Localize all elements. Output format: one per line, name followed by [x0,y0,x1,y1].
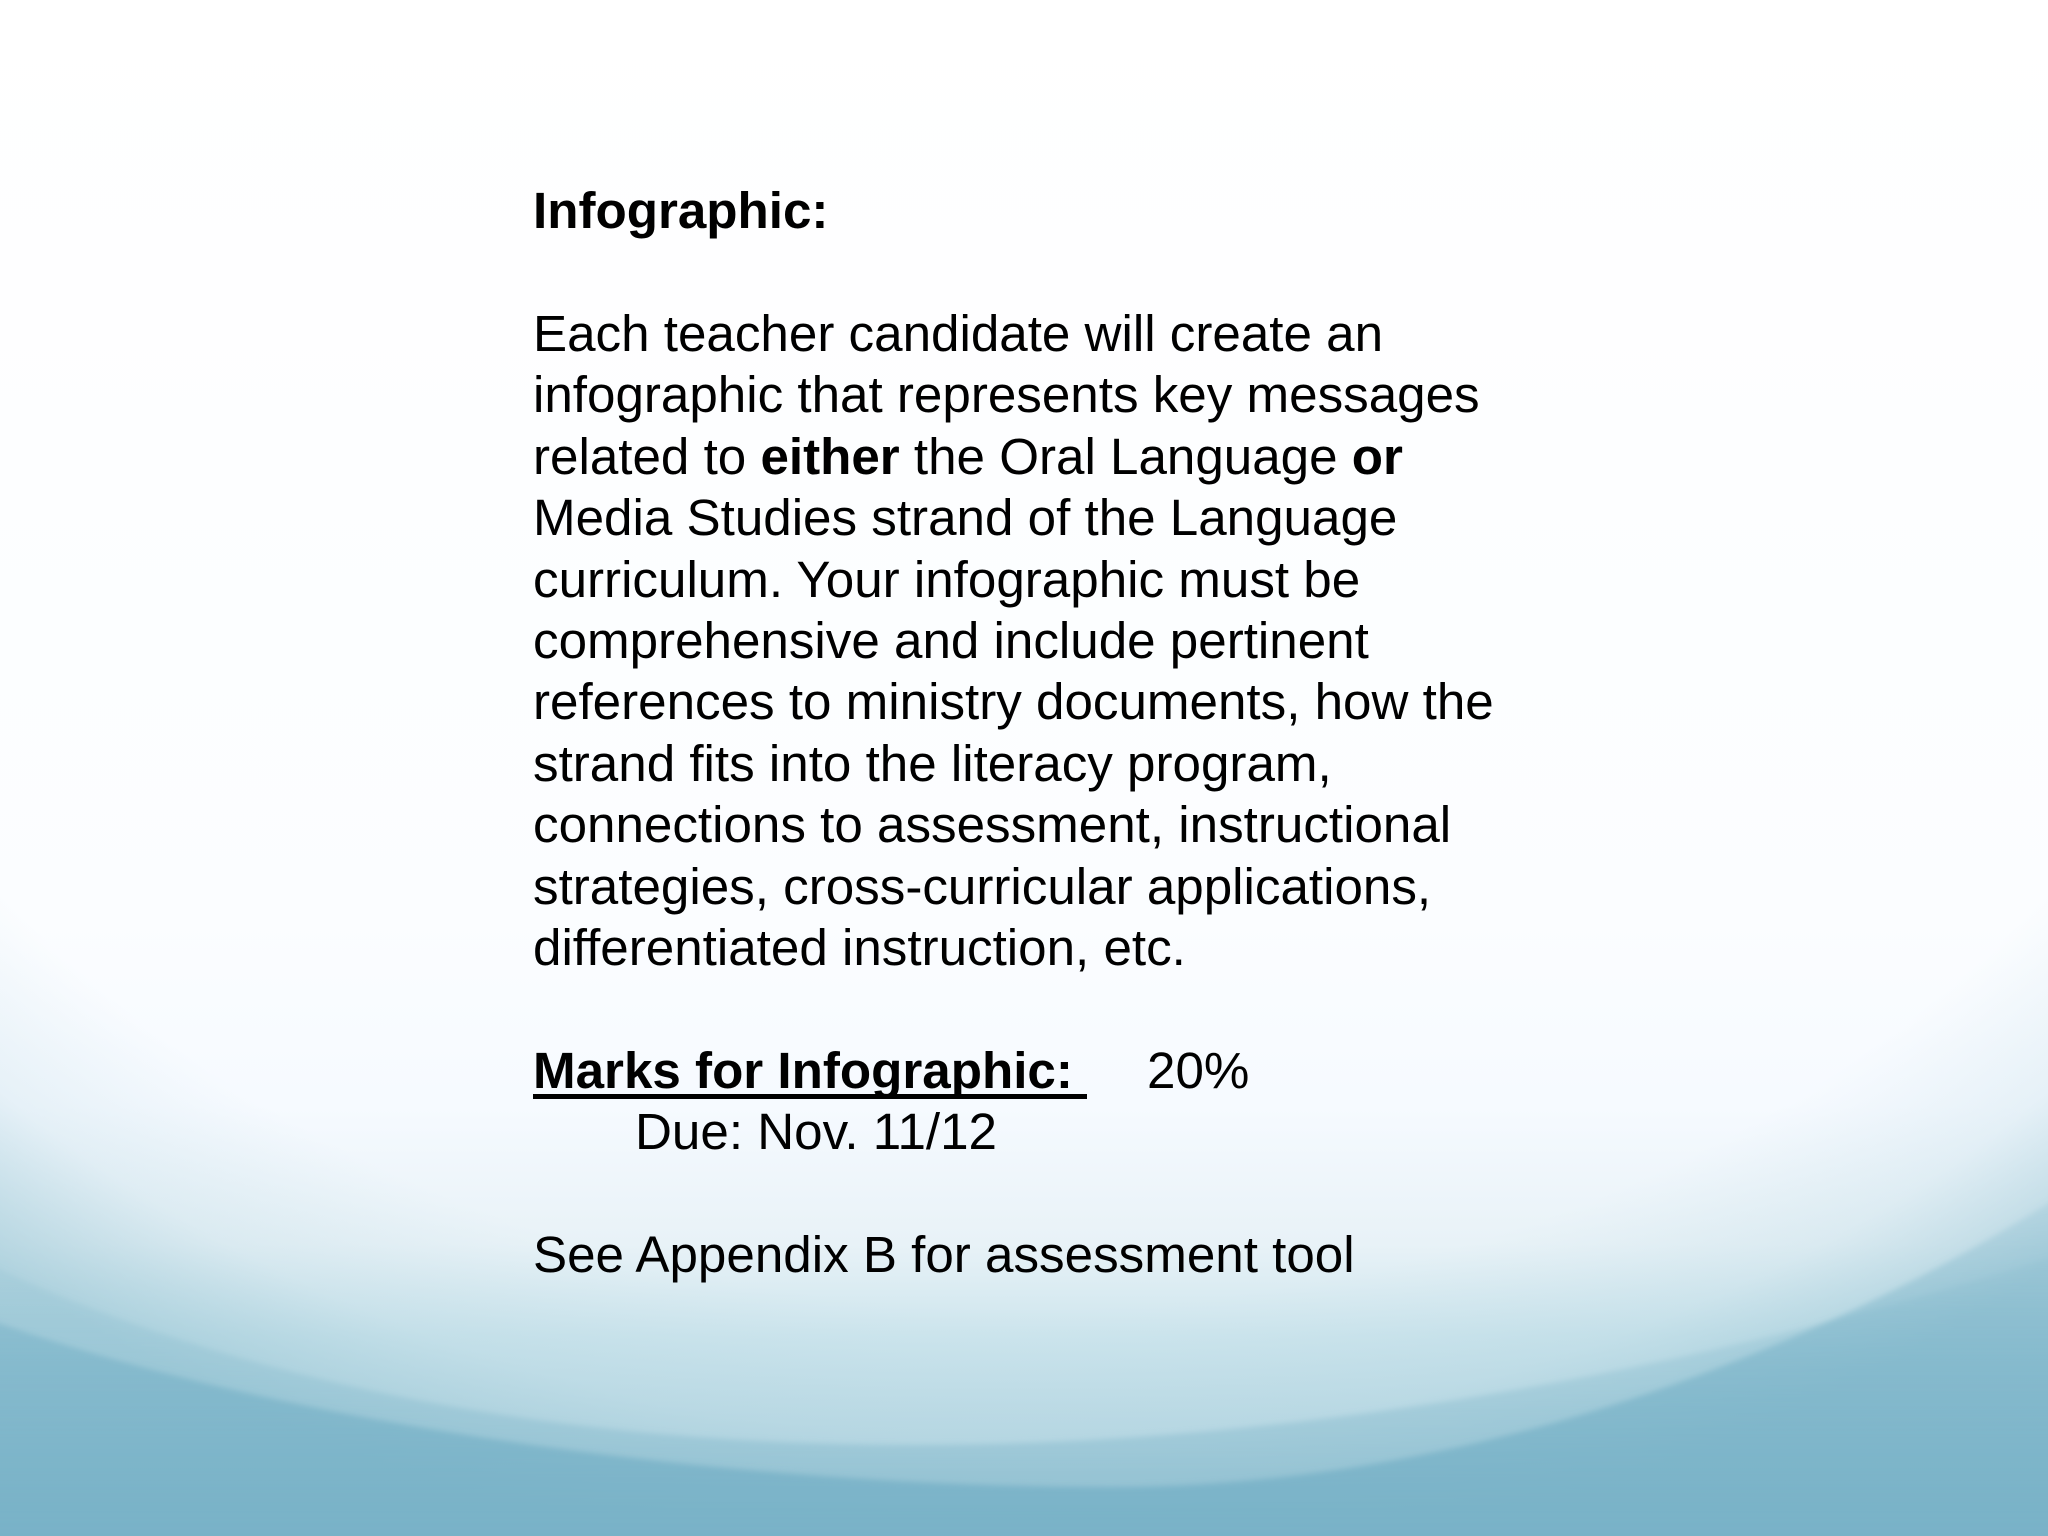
marks heading with underline: Marks for Infographic: [533,1042,1073,1099]
due date: Due: Nov. 11/12 [635,1103,997,1160]
paragraph: assignment instructions: related to either the Oral Language or [533,428,1403,485]
marks value: 20%: 20% [1147,1042,1249,1099]
paragraph: assignment instructions: differentiated instruction, etc. [533,919,1186,976]
paragraph: assignment instructions: strand fits into the literacy program, [533,735,1332,792]
paragraph: assignment instructions: connections to assessment, instructional [533,796,1451,853]
paragraph: assignment instructions: comprehensive and include pertinent [533,612,1369,669]
paragraph: assignment instructions: Each teacher candidate will create an [533,305,1383,362]
heading: Infographic: Infographic: [533,182,828,239]
note: appendix reference: See Appendix B for assessment tool [533,1226,1355,1283]
paragraph: assignment instructions: curriculum. Your infographic must be [533,551,1360,608]
paragraph: assignment instructions: Media Studies strand of the Language [533,489,1397,546]
paragraph: assignment instructions: strategies, cross-curricular applications, [533,858,1431,915]
paragraph: assignment instructions [533,305,1494,976]
paragraph: assignment instructions: references to ministry documents, how the [533,673,1494,730]
paragraph: assignment instructions: infographic that represents key messages [533,366,1480,423]
